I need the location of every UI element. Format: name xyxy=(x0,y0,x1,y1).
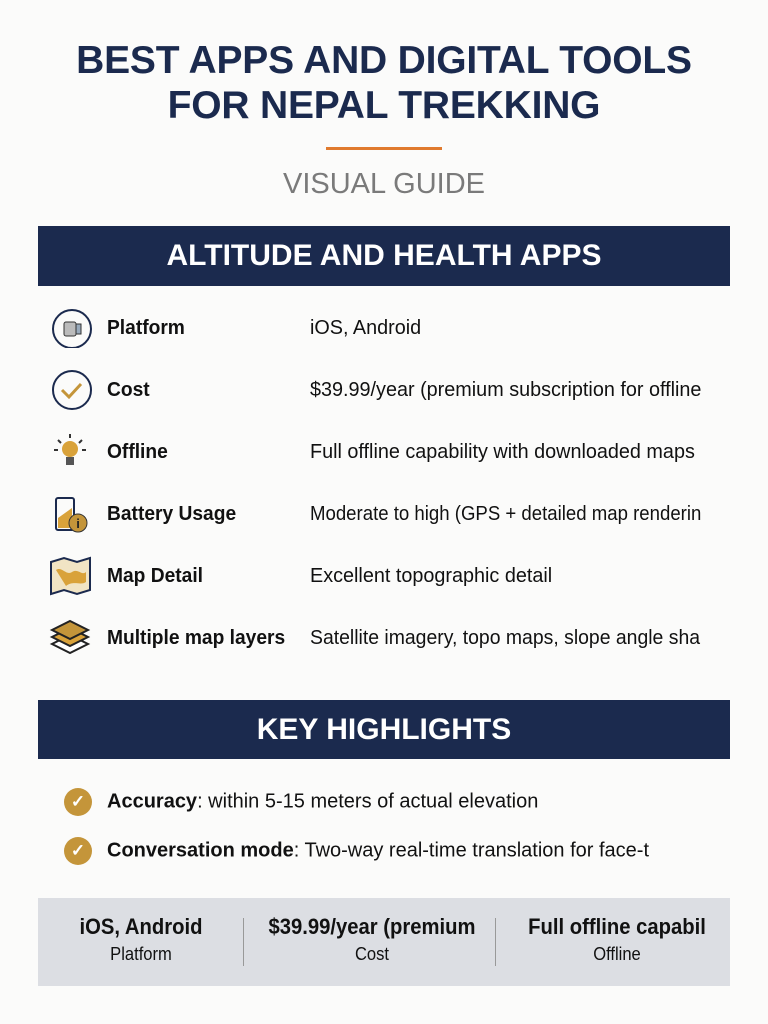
section header: altitude and health apps: ALTITUDE AND HEALTH APPS xyxy=(166,239,602,272)
stat: platform: Platform xyxy=(110,944,172,964)
row: map detail xyxy=(50,556,552,596)
stat: offline: Offline xyxy=(593,944,641,964)
row: cost: $39.99/year (premium subscription for offline xyxy=(310,379,701,401)
row: multiple map layers xyxy=(50,620,700,654)
orange divider xyxy=(326,147,442,150)
title: FOR NEPAL TREKKING xyxy=(168,84,600,127)
row: cost: Cost xyxy=(107,379,150,401)
stat: offline: Full offline capabil xyxy=(528,914,706,939)
row: offline: Offline xyxy=(107,441,168,463)
stat: platform: iOS, Android xyxy=(80,914,202,939)
stat: cost: $39.99/year (premium xyxy=(268,914,476,939)
subtitle: VISUAL GUIDE xyxy=(283,168,485,200)
section header: key highlights xyxy=(38,700,730,759)
stat: cost: Cost xyxy=(355,944,389,964)
row: multiple map layers: Satellite imagery, topo maps, slope angle sha xyxy=(310,627,700,649)
stat: platform xyxy=(80,914,202,964)
highlight: conversation mode: Conversation mode: Two-way real-time translation for face-t xyxy=(107,839,649,861)
section header: altitude and health apps xyxy=(38,226,730,286)
row: platform xyxy=(52,309,421,348)
highlight: conversation mode: ✓ xyxy=(71,841,85,860)
row: battery usage: i xyxy=(76,516,80,531)
stat: cost xyxy=(268,914,476,964)
row: multiple map layers: Multiple map layers xyxy=(107,627,285,649)
title: BEST APPS AND DIGITAL TOOLS xyxy=(76,39,692,82)
row: battery usage: Moderate to high (GPS + detailed map renderin xyxy=(310,503,701,525)
row: cost xyxy=(52,370,701,410)
panel: app details xyxy=(50,309,701,654)
row: platform: iOS, Android xyxy=(310,317,421,339)
row: battery usage xyxy=(55,497,701,532)
row: offline: Full offline capability with downloaded maps xyxy=(310,441,695,463)
row: platform: Platform xyxy=(107,317,185,339)
section header: key highlights: KEY HIGHLIGHTS xyxy=(257,713,511,746)
row: map detail: Map Detail xyxy=(107,565,203,587)
title xyxy=(76,39,692,127)
row: map detail: Excellent topographic detail xyxy=(310,565,552,587)
stat: offline xyxy=(528,914,706,964)
row: offline xyxy=(54,434,695,465)
highlight: accuracy: Accuracy: within 5-15 meters of actual elevation xyxy=(107,790,538,812)
summary stats bar xyxy=(38,898,730,986)
highlight: accuracy: ✓ xyxy=(71,792,85,811)
row: battery usage: Battery Usage xyxy=(107,503,236,525)
